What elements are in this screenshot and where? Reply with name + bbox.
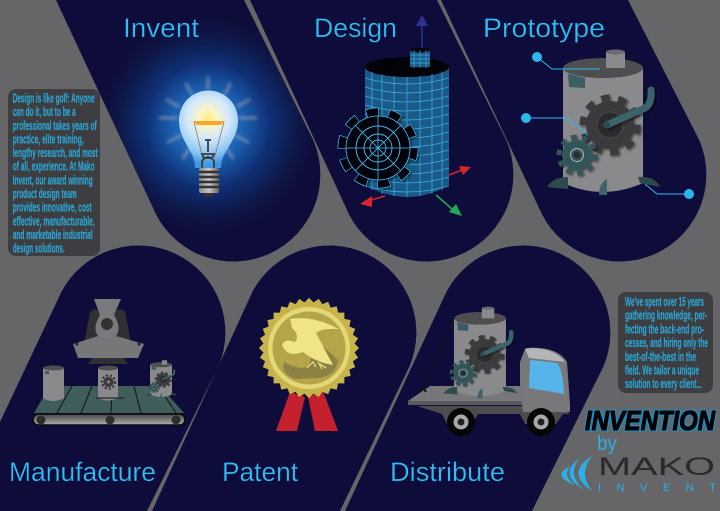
callout: middle bbox=[521, 113, 588, 135]
icon: small cylinder bbox=[410, 48, 430, 68]
icon: finished can bbox=[146, 360, 177, 398]
arrow: red left bbox=[360, 196, 385, 207]
heading: patent: Patent bbox=[222, 457, 298, 487]
panel shape: prototype bbox=[441, 0, 706, 262]
panel shape: patent bbox=[152, 245, 416, 511]
icon: plain can bbox=[43, 366, 64, 401]
text block: design is like golf: can do it, but to be a bbox=[13, 105, 76, 119]
callout: bottom bbox=[645, 184, 694, 199]
icon: prototype machine bbox=[547, 50, 660, 195]
logo subtitle: INVENT bbox=[598, 482, 716, 494]
icon: wireframe gear bbox=[342, 112, 414, 184]
text block: design is like golf: practice, elite training, bbox=[13, 132, 84, 146]
truck chassis bbox=[417, 406, 570, 424]
logo mark bbox=[562, 456, 592, 491]
panel: prototype bbox=[441, 0, 706, 262]
truck cab bbox=[520, 348, 570, 412]
heading: manufacture: Manufacture bbox=[9, 457, 156, 487]
icon: ribbon bbox=[276, 391, 338, 431]
truck hook bbox=[418, 388, 426, 392]
panel shape: manufacture bbox=[0, 245, 225, 511]
panel: design bbox=[250, 0, 513, 262]
heading: prototype: Prototype bbox=[483, 13, 605, 43]
text block: design is like golf: of all, experience. At Mako bbox=[13, 160, 95, 174]
panel: patent bbox=[152, 245, 416, 511]
icon: truck bbox=[408, 307, 570, 436]
icon: wireframe cylinder bbox=[342, 15, 471, 216]
text block: design is like golf bbox=[8, 89, 100, 256]
truck wheel front bbox=[527, 408, 555, 436]
callout: top bbox=[532, 52, 600, 69]
text block: design is like golf: lengthy research, and most bbox=[13, 146, 98, 160]
panel: invent bbox=[56, 0, 320, 262]
panel shape: distribute bbox=[345, 245, 610, 511]
truck machine bbox=[444, 307, 517, 398]
text block: experience bbox=[618, 292, 713, 393]
truck chain bbox=[425, 316, 455, 385]
text block: design is like golf: Design is like golf: Anyone bbox=[13, 92, 95, 106]
text: by: by bbox=[597, 433, 617, 455]
panel shape: invent bbox=[56, 0, 320, 262]
arrow: red right bbox=[449, 166, 471, 175]
text block: design is like golf: effective, manufacturable, bbox=[13, 214, 95, 228]
text block: design is like golf: professional takes years of bbox=[13, 119, 97, 133]
panel shape: design bbox=[250, 0, 513, 262]
icon: can with gear bbox=[96, 366, 124, 400]
text block: design is like golf: Invent, our award winning bbox=[13, 173, 93, 187]
logo wordmark: MAKO bbox=[598, 453, 715, 481]
icon: light bulb bbox=[160, 78, 256, 197]
arrow: blue up bbox=[416, 15, 428, 48]
truck window bbox=[529, 360, 564, 394]
logo: mako invent bbox=[562, 453, 716, 494]
panel: manufacture bbox=[0, 245, 225, 511]
heading: design: Design bbox=[314, 13, 397, 43]
text block: design is like golf: product design team bbox=[13, 187, 77, 201]
icon: press machine bbox=[73, 299, 144, 364]
heading: distribute: Distribute bbox=[390, 457, 505, 487]
arrow: green bbox=[436, 195, 462, 216]
panel: distribute bbox=[345, 245, 610, 511]
truck bed bbox=[408, 386, 525, 401]
truck wheel rear bbox=[447, 408, 475, 436]
text block: design is like golf: and marketable industrial bbox=[13, 228, 93, 242]
heading: invent: Invent bbox=[123, 13, 200, 43]
icon: conveyor belt bbox=[33, 386, 185, 425]
text block: design is like golf: provides innovative, cost bbox=[13, 201, 92, 215]
icon: gold seal bbox=[259, 298, 359, 398]
text block: design is like golf: design solutions. bbox=[13, 242, 65, 256]
